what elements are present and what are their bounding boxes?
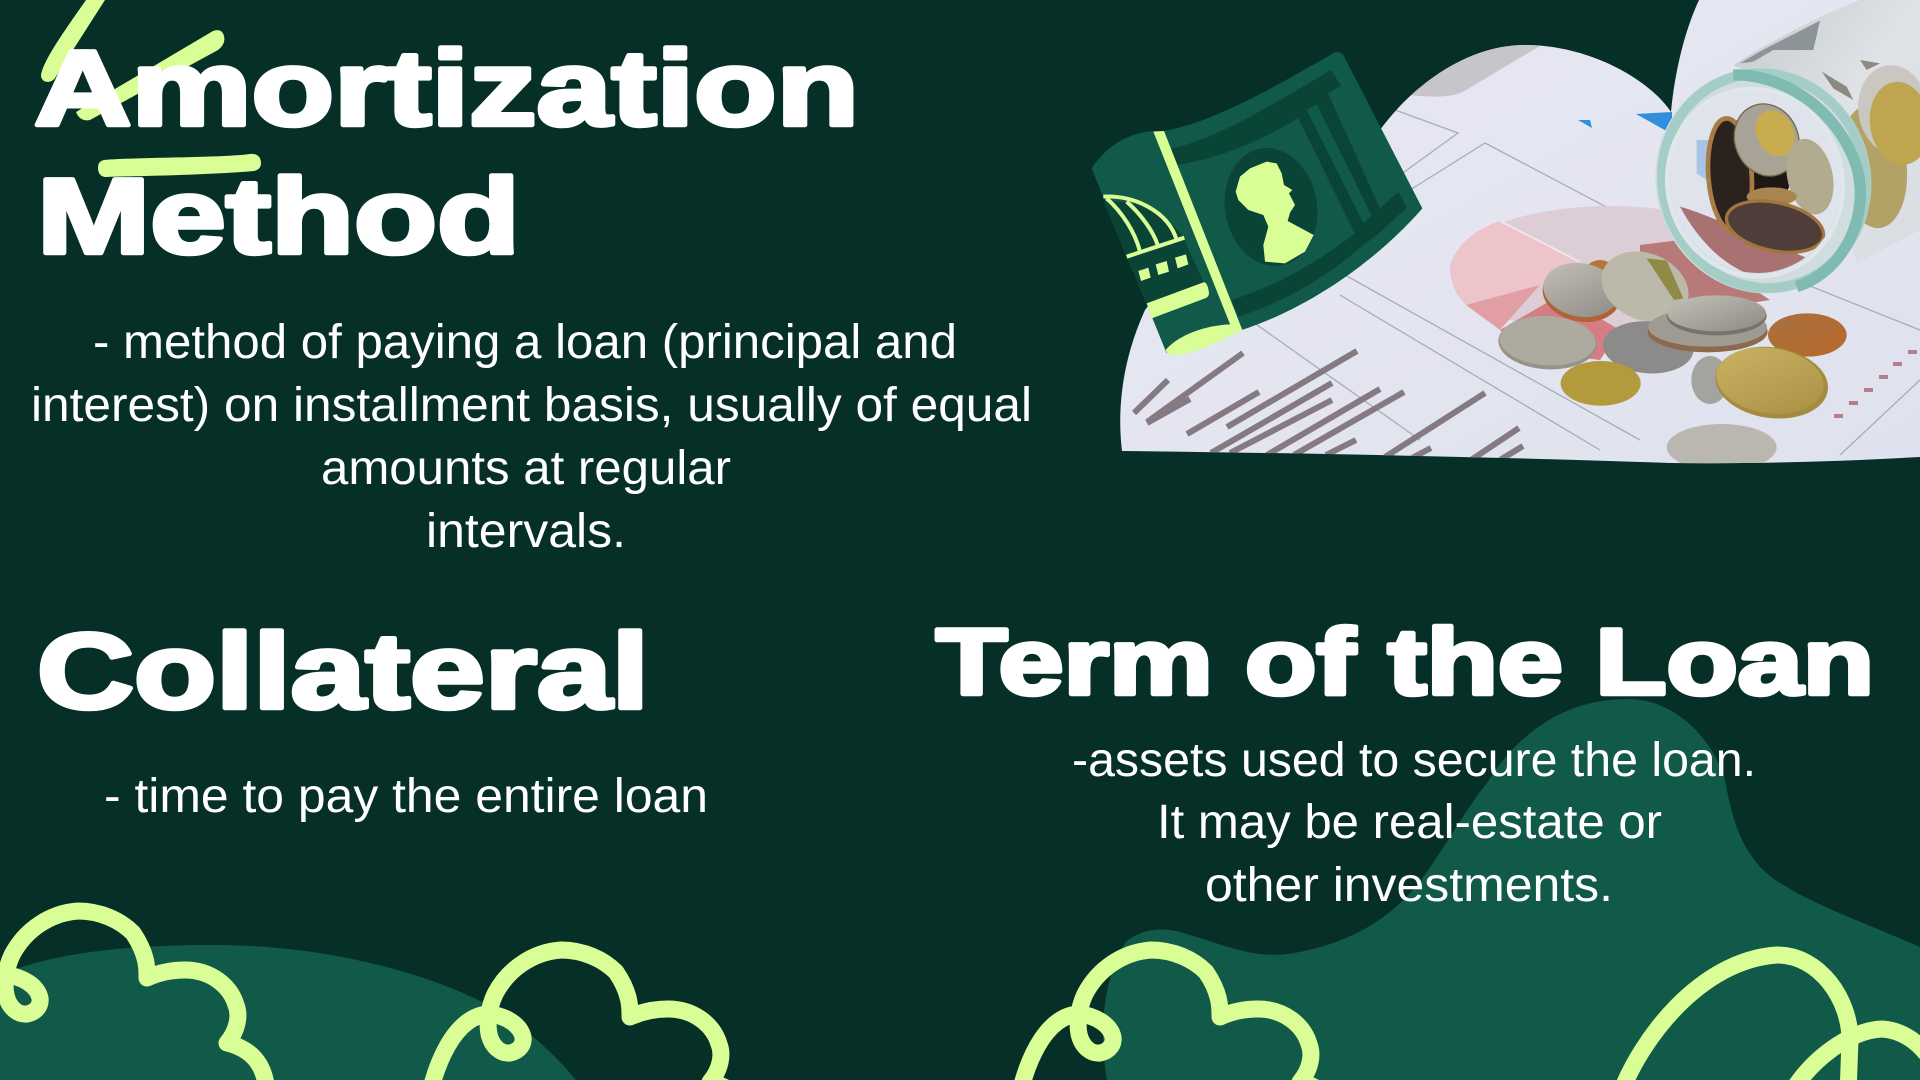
grey object at top of photo xyxy=(1410,45,1540,97)
scribble: cloud 1 xyxy=(0,911,267,1080)
text: term definition: It may be real-estate or xyxy=(1157,796,1662,849)
photo: coins spilling from a jar onto charts xyxy=(1110,0,1920,471)
scribble: accent marks over title xyxy=(41,0,261,177)
scribble: cloud 4 xyxy=(1620,955,1920,1080)
note right stripes xyxy=(1288,82,1407,245)
blob: bottom left xyxy=(0,945,576,1080)
coins xyxy=(1497,239,1847,471)
text: amortization definition: intervals. xyxy=(426,505,626,558)
text: amortization definition xyxy=(31,316,1032,558)
left dark panel xyxy=(1103,201,1205,305)
lime band xyxy=(1153,131,1242,330)
note top band xyxy=(1170,70,1341,165)
blue chart marks xyxy=(1578,112,1672,130)
scribble: cloud 3 xyxy=(1013,950,1340,1080)
scribble: cloud 2 xyxy=(423,950,750,1080)
paper grid lines xyxy=(1250,110,1920,455)
title: Amortization Method: Amortization xyxy=(34,28,859,148)
heading: Collateral: Collateral xyxy=(37,611,649,731)
heading: Term of the Loan: Term of the Loan xyxy=(936,609,1874,714)
lime bar xyxy=(1147,282,1209,318)
text: amortization definition: amounts at regular xyxy=(321,442,731,495)
dome xyxy=(1103,197,1184,257)
jar xyxy=(1656,0,1920,294)
jar rim xyxy=(1656,68,1872,294)
jar interior xyxy=(1670,92,1840,273)
text: term definition: other investments. xyxy=(1205,859,1613,912)
text: term definition xyxy=(1072,734,1756,912)
pie chart xyxy=(1450,206,1770,360)
jar body xyxy=(1733,0,1920,263)
window squares xyxy=(1138,254,1188,281)
title: Amortization Method: Method xyxy=(37,156,520,276)
note bottom band xyxy=(1232,233,1363,317)
text: collateral definition: - time to pay the entire loan xyxy=(104,770,708,823)
text: amortization definition: - method of paying a loan (principal and xyxy=(93,316,957,369)
legend marks xyxy=(1834,350,1917,418)
portrait silhouette xyxy=(1236,162,1314,263)
text: term definition: -assets used to secure the loan. xyxy=(1072,734,1756,787)
lime roll end xyxy=(1166,324,1242,355)
title: Amortization Method xyxy=(34,28,859,276)
chart bars xyxy=(1134,351,1523,460)
text: amortization definition: interest) on installment basis, usually of equal xyxy=(31,379,1032,432)
portrait oval xyxy=(1215,141,1327,273)
icon: banknote illustration xyxy=(1092,52,1422,355)
blob: bottom right xyxy=(1103,699,1920,1080)
